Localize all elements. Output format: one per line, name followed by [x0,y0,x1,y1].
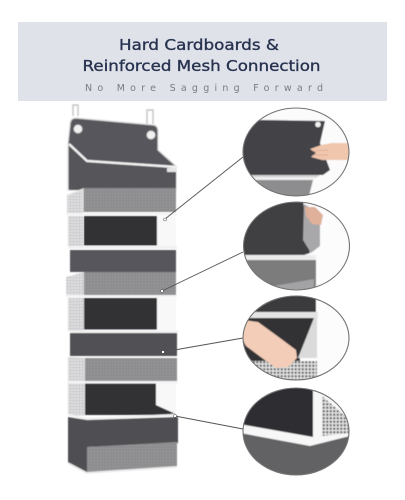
hanging organizer [66,105,178,473]
top pocket front [69,145,176,190]
dark panel 2 [68,298,176,331]
mesh row 1 [67,188,176,215]
detail circle 3: pressing hand on mesh [240,294,352,382]
title [82,36,320,75]
mesh row 2 [66,272,176,296]
dark panel 3 [68,384,178,416]
callout lines [162,157,243,429]
icon: hand [305,207,323,225]
title: Hard Cardboards & [119,36,279,54]
dark band 1 [70,250,176,272]
top flap [68,118,176,190]
callout anchor dots [160,218,176,418]
detail circle 1: flap with hand [240,105,352,200]
icon: door hooks [73,105,153,124]
title: Reinforced Mesh Connection [82,57,320,75]
header band [18,22,387,101]
dark band 2 [70,333,177,356]
dark panel 1 [68,216,176,247]
icon: hand [240,320,297,368]
icon: hand [310,143,350,160]
mesh row 3 [68,357,177,381]
detail circle 4: reinforced corner [240,385,352,477]
detail circle 2: folded side with hand [240,200,352,292]
subtitle: No More Sagging Forward [85,83,323,94]
bottom pocket [68,417,178,473]
